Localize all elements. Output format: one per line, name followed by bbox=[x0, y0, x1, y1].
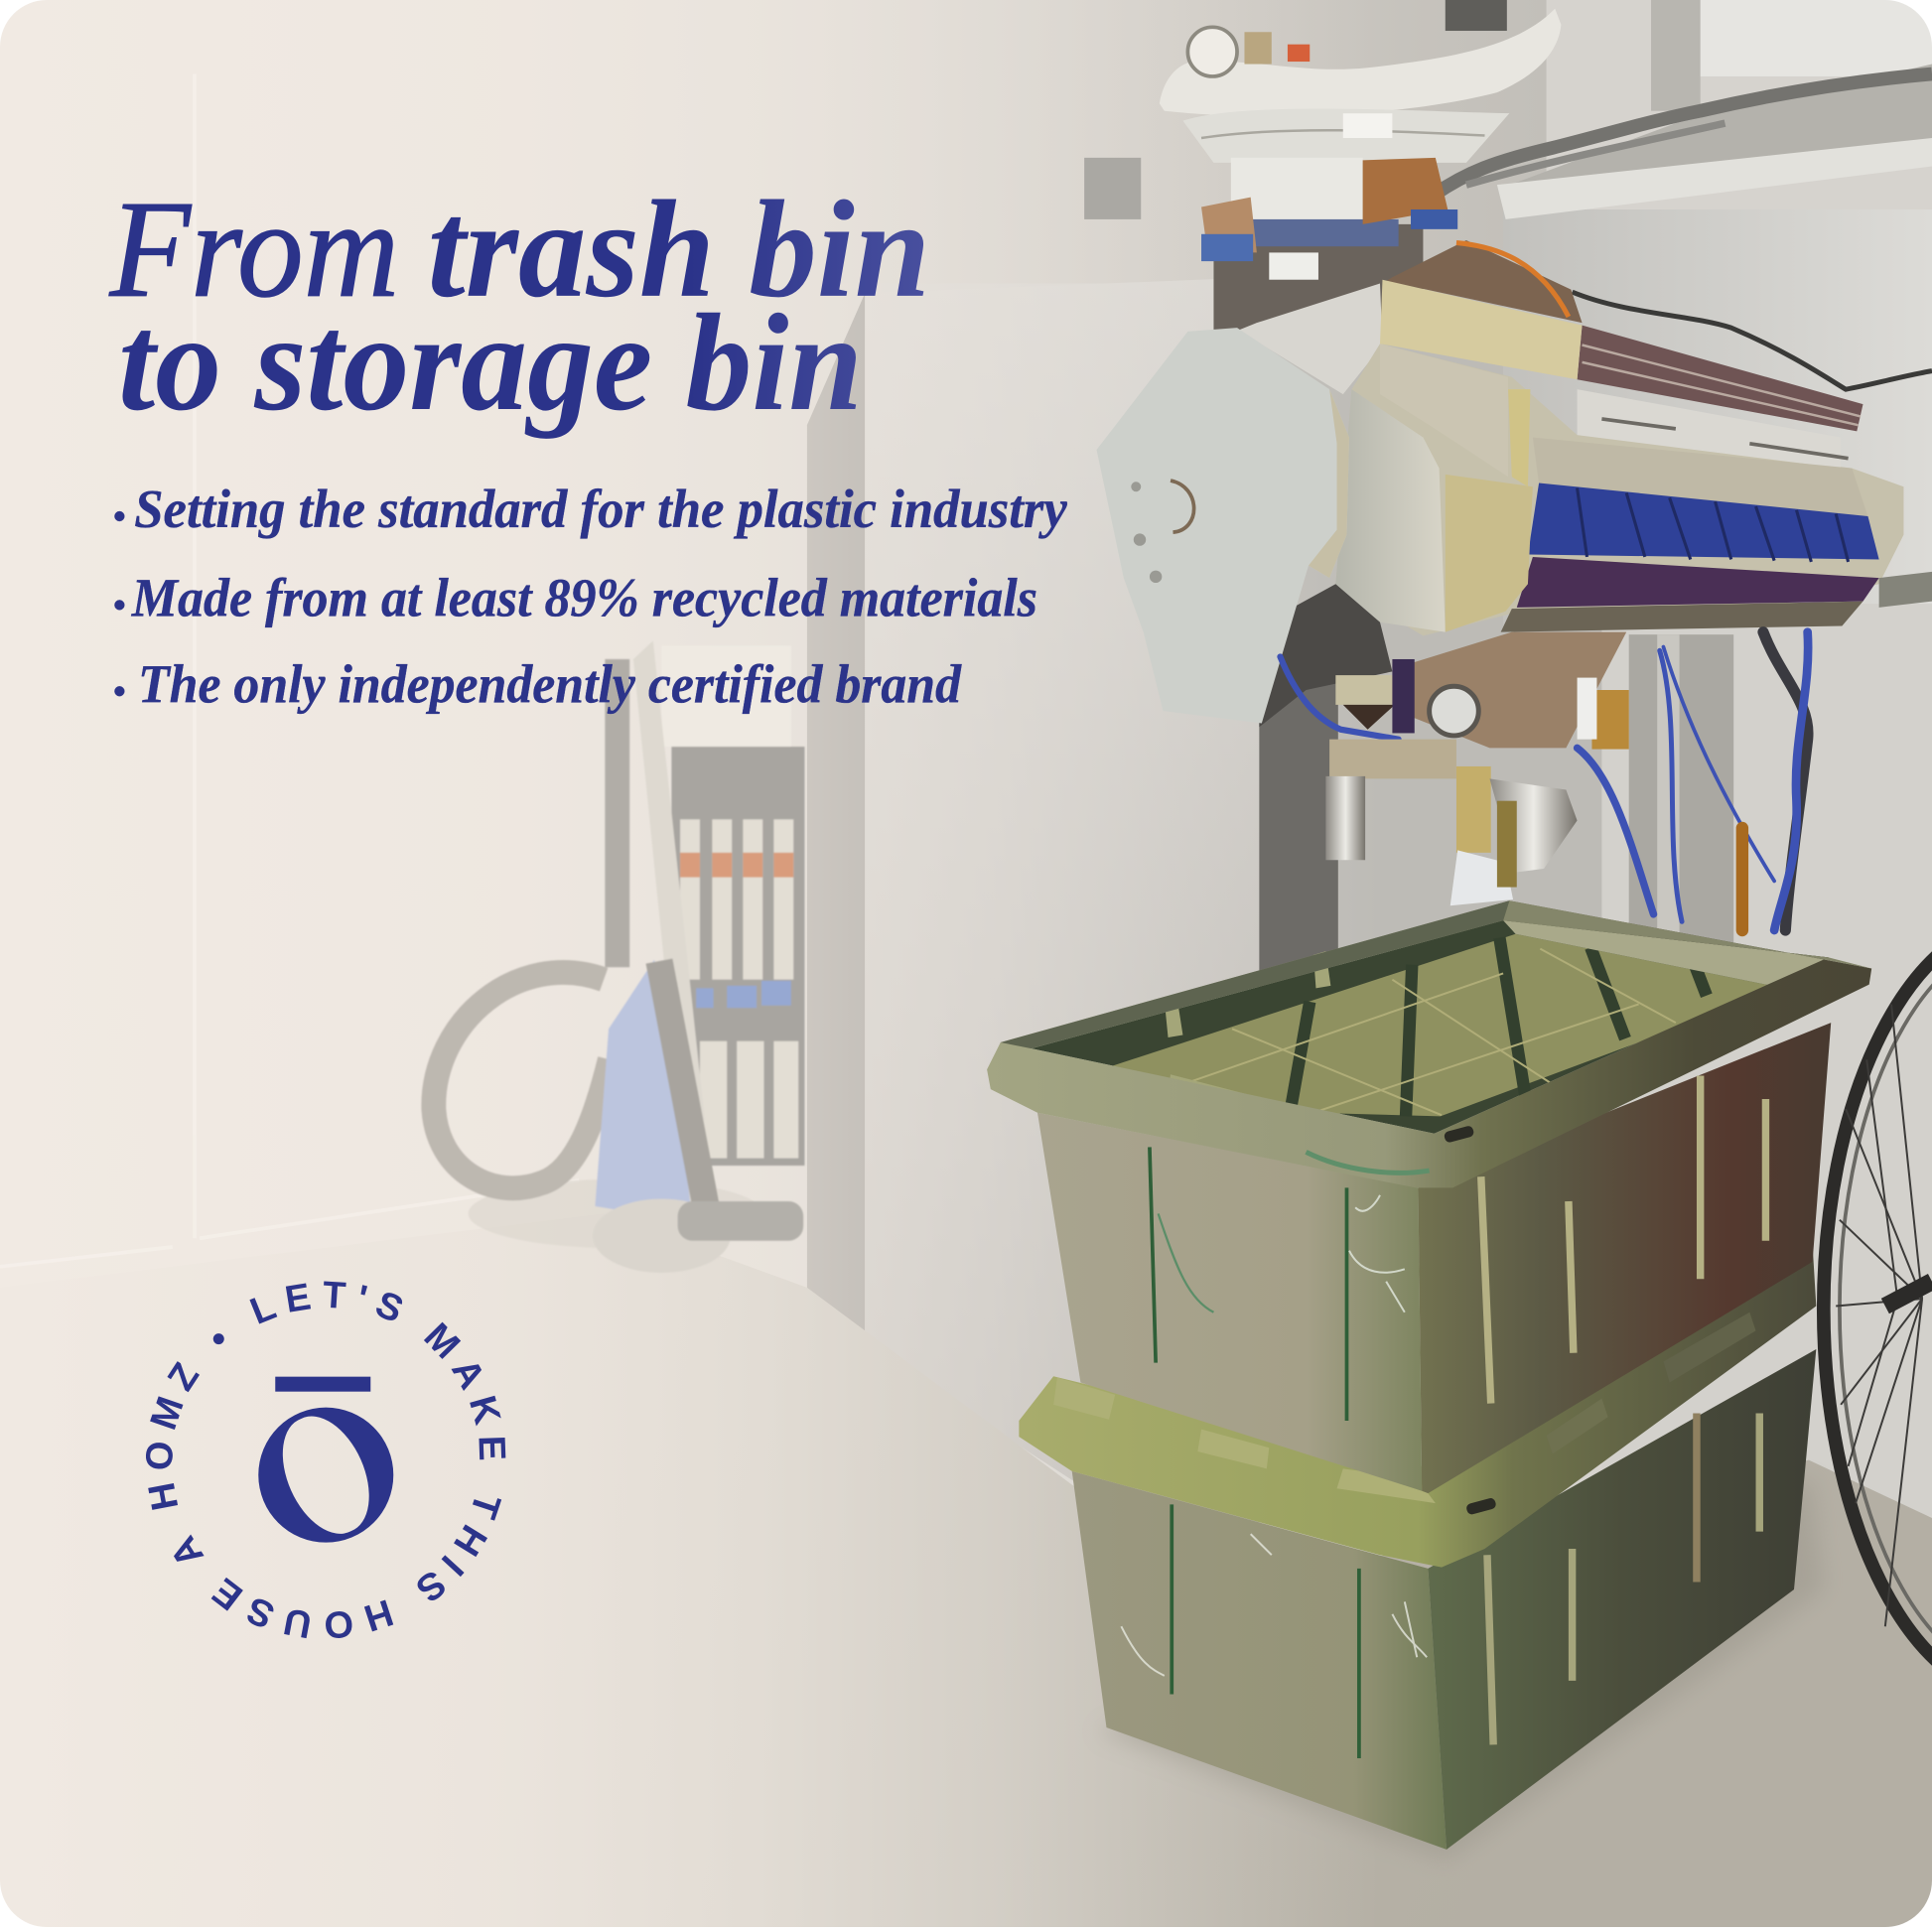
shelves and cables at upper right bbox=[1084, 0, 1932, 1004]
die head and nozzles bbox=[1325, 632, 1629, 905]
upper bin rim bbox=[987, 900, 1871, 1187]
title bbox=[109, 173, 930, 440]
title: to storage bin bbox=[118, 286, 863, 440]
logo ring bbox=[258, 1408, 393, 1543]
logo bar bbox=[275, 1377, 370, 1392]
lower storage bin bbox=[1019, 1244, 1816, 1850]
window strip bbox=[1578, 389, 1849, 469]
bullet: certified brand: The only independently certified brand bbox=[138, 653, 962, 714]
upper storage bin bbox=[987, 900, 1871, 1493]
mid beige casting bbox=[1380, 344, 1508, 477]
hopper insulation and gauge bbox=[1160, 9, 1561, 221]
bullet list bbox=[114, 479, 1068, 714]
inner housing bbox=[1335, 389, 1446, 632]
bicycle wheel bbox=[1824, 919, 1932, 1698]
separator dot bbox=[213, 1333, 224, 1344]
grey side housing with pulley bbox=[1097, 328, 1349, 724]
brown heater barrel bbox=[1578, 326, 1863, 431]
vacuum cleaner and tool rack (faded) bbox=[434, 640, 804, 1273]
right support rod bbox=[1879, 572, 1932, 608]
cream fade overlay across the photo bbox=[0, 0, 1380, 1932]
beige top plate bbox=[1380, 280, 1583, 379]
under plate bbox=[1501, 602, 1863, 632]
main body bbox=[1335, 344, 1903, 635]
extrusion machine bbox=[1097, 9, 1932, 930]
bin inner floor with ribs bbox=[1032, 920, 1829, 1140]
door and skirting lines on the left wall bbox=[0, 73, 579, 1267]
circular logo badge bbox=[146, 1281, 506, 1638]
beige stripe bbox=[1533, 438, 1867, 516]
bullet: plastic industry standard: Setting the standard for the plastic industry bbox=[134, 479, 1068, 539]
blue and dark cables bbox=[1280, 632, 1808, 930]
throat section with rings bbox=[1201, 158, 1583, 394]
blue barrel panel bbox=[1528, 483, 1879, 562]
maroon barrel band bbox=[1517, 557, 1879, 608]
title: trash bin bbox=[428, 173, 930, 327]
bin shadow on the floor bbox=[1097, 1478, 1824, 1861]
bullet: recycled materials: Made from at least 89% recycled materials bbox=[131, 568, 1037, 628]
circular slogan: LET'S MAKE THIS HOUSE A HOMZ bbox=[146, 1281, 506, 1638]
yellow strap bbox=[1508, 389, 1530, 486]
yellow casting bbox=[1446, 475, 1533, 632]
dark chunk behind housing bbox=[1259, 584, 1392, 727]
title: From bbox=[109, 173, 399, 327]
